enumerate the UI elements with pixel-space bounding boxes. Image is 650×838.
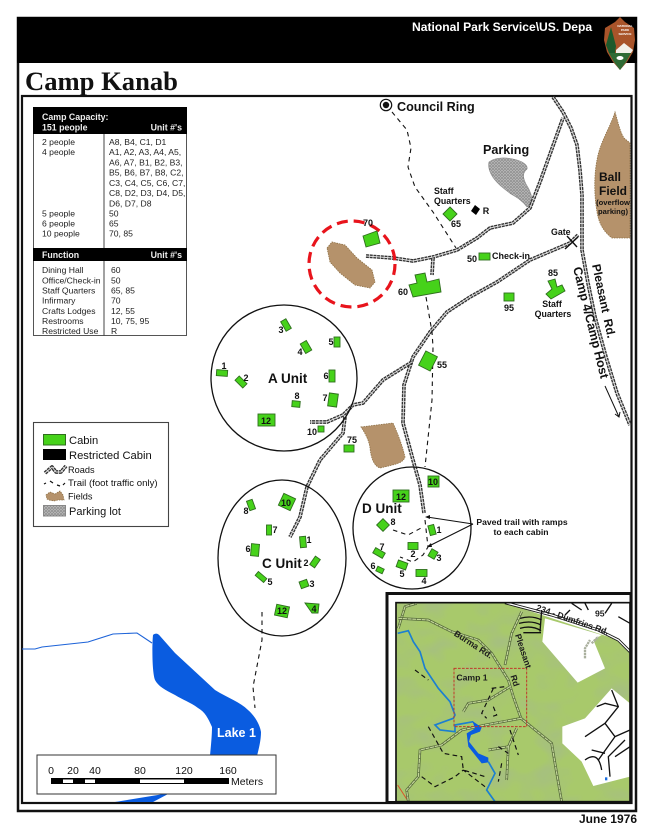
capacity rows: D6, D7, D8 <box>109 198 152 208</box>
locator rectangle: Camp 1 <box>454 668 527 727</box>
function rows: Restricted Use <box>42 326 99 336</box>
legend: roads: Roads <box>68 465 95 475</box>
D Unit circle: 8 <box>390 517 396 527</box>
roads <box>290 97 630 537</box>
C Unit ellipse: 5 <box>267 577 273 587</box>
Lake 1 with stream <box>22 633 261 802</box>
icon: National Park Service arrowhead <box>604 17 635 70</box>
C Unit ellipse <box>218 480 346 636</box>
agency text: National Park Service\US. Depa <box>412 20 592 34</box>
inset map border <box>396 603 630 802</box>
capacity rows: A8, B4, C1, D1 <box>109 137 167 147</box>
function rows: 60 <box>111 265 121 275</box>
capacity rows: 5 people <box>42 208 75 218</box>
capacity rows: C8, D2, D3, D4, D5, <box>109 188 185 198</box>
inset labels: Pleasant <box>513 633 534 670</box>
D Unit circle: 2 <box>410 549 416 559</box>
A Unit circle <box>211 305 357 451</box>
C Unit ellipse: 10 <box>281 498 291 508</box>
inset labels: Camp 1 <box>456 673 488 683</box>
D Unit circle: 7 <box>379 542 385 552</box>
cabins: central area: Staff <box>542 299 562 309</box>
inset labels <box>452 602 610 688</box>
inset locator map <box>396 602 630 802</box>
road labels: Camp 4/Camp Host <box>570 265 612 381</box>
cabins: central area <box>398 186 578 319</box>
capacity rows: 50 <box>109 208 119 218</box>
icon: council ring <box>380 99 392 111</box>
A Unit circle: 6 <box>323 371 329 381</box>
A Unit circle: 1 <box>221 361 227 371</box>
A Unit circle: 3 <box>278 325 284 335</box>
D Unit circle: 6 <box>370 561 376 571</box>
cabins: central area: Check-in <box>492 251 530 261</box>
D Unit circle: 12 <box>396 492 406 502</box>
legend: restricted cabin: Restricted Cabin <box>69 450 152 462</box>
function rows: Infirmary <box>42 296 76 306</box>
ball field label <box>596 170 630 216</box>
ball field label: Ball <box>599 170 621 184</box>
title: Camp Kanab <box>25 66 178 96</box>
D Unit circle: 10 <box>428 477 438 487</box>
C Unit ellipse: 7 <box>272 525 278 535</box>
C Unit ellipse: 6 <box>245 544 251 554</box>
legend: cabin: Cabin <box>69 435 98 447</box>
inset locator panel <box>387 594 631 802</box>
parking label: Parking <box>483 143 529 157</box>
scale bar: 0 <box>48 765 54 777</box>
A Unit circle: 12 <box>261 416 271 426</box>
cabins: central area: Quarters <box>535 309 571 319</box>
cabins 55 and 75 with field: 55 <box>437 360 447 370</box>
inset labels: Rd <box>508 674 522 688</box>
inset labels: 234 - Dumfries Rd. <box>535 602 610 637</box>
function rows: Office/Check-in <box>42 276 101 286</box>
cabins 55 and 75 with field: 75 <box>347 435 357 445</box>
C Unit ellipse: C Unit <box>262 556 302 571</box>
parking lot <box>489 158 532 207</box>
scale bar: 40 <box>89 765 101 777</box>
cabins: central area: Staff <box>434 186 454 196</box>
scale bar: 160 <box>219 765 237 777</box>
ball field label: parking) <box>598 207 628 216</box>
C Unit ellipse: 12 <box>277 606 287 616</box>
cabins: central area: Gate <box>551 227 571 237</box>
road labels <box>570 263 620 417</box>
inset labels: 95 <box>595 609 605 619</box>
road labels: Pleasant Rd. <box>589 263 618 339</box>
cabins: central area: 85 <box>548 268 558 278</box>
capacity rows: 6 people <box>42 218 75 228</box>
cabins: central area: 65 <box>451 219 461 229</box>
cabins: central area: 95 <box>504 303 514 313</box>
field: overflow ball field <box>595 112 630 238</box>
cabins: central area: 60 <box>398 287 408 297</box>
function rows <box>42 265 149 336</box>
legend: fields: Fields <box>68 492 93 502</box>
table heading: function <box>42 250 182 260</box>
icon: National Park Service arrowhead: SERVICE <box>618 32 632 36</box>
table heading: function: Unit #'s <box>151 250 182 260</box>
D Unit circle: D Unit <box>362 501 402 516</box>
map border <box>22 96 632 803</box>
foot trails <box>253 112 456 708</box>
scale bar: Meters <box>231 776 263 788</box>
A Unit circle: 10 <box>307 427 317 437</box>
C Unit ellipse: 4 <box>311 604 317 614</box>
D Unit circle: 1 <box>436 525 442 535</box>
capacity rows: 65 <box>109 218 119 228</box>
scale bar: 20 <box>67 765 79 777</box>
function rows: 12, 55 <box>111 306 135 316</box>
function rows: 65, 85 <box>111 286 135 296</box>
capacity rows: A1, A2, A3, A4, A5, <box>109 147 181 157</box>
scale bar: 120 <box>175 765 193 777</box>
D Unit circle <box>353 467 471 589</box>
capacity rows: 70, 85 <box>109 228 133 238</box>
cabins: central area: R <box>483 206 490 216</box>
A Unit circle: 8 <box>294 391 300 401</box>
A Unit circle: 5 <box>328 337 334 347</box>
table heading: capacity: 151 people <box>42 122 88 132</box>
legend: parking lot: Parking lot <box>69 506 121 518</box>
capacity rows: 10 people <box>42 228 80 238</box>
table heading: capacity: Unit #'s <box>151 122 182 132</box>
capacity rows: C3, C4, C5, C6, C7, <box>109 178 185 188</box>
D Unit circle: 3 <box>436 553 442 563</box>
inset labels: Burma Rd. <box>452 628 494 661</box>
table heading: capacity: Camp Capacity: <box>42 112 109 122</box>
header band <box>17 17 637 63</box>
callout: paved trail arrows: to each cabin <box>494 527 548 537</box>
icon: National Park Service arrowhead: NATIONAL <box>617 24 633 28</box>
function rows: Restrooms <box>42 316 84 326</box>
function rows: Dining Hall <box>42 265 84 275</box>
capacity rows: B5, B6, B7, B8, C2, <box>109 168 184 178</box>
callout: paved trail arrows <box>425 515 568 547</box>
function rows: Staff Quarters <box>42 286 95 296</box>
callout: Cabin 70 field in red circle <box>309 218 395 307</box>
table heading: capacity <box>42 112 182 132</box>
cabins: central area: 50 <box>467 254 477 264</box>
ball field label: (overflow <box>596 198 630 207</box>
C Unit ellipse: 1 <box>306 535 312 545</box>
D Unit circle: 4 <box>421 576 427 586</box>
callout: paved trail arrows: Paved trail with ramps <box>476 517 568 527</box>
legend: trail: Trail (foot traffic only) <box>68 478 158 489</box>
callout: Cabin 70 field in red circle: 70 <box>363 218 373 228</box>
Lake 1 with stream: Lake 1 <box>217 726 256 740</box>
C Unit ellipse: 3 <box>309 579 315 589</box>
C Unit ellipse: 2 <box>303 558 309 568</box>
function rows: 70 <box>111 296 121 306</box>
A Unit circle: 7 <box>322 393 328 403</box>
scale bar: 80 <box>134 765 146 777</box>
scale bar <box>37 755 276 794</box>
capacity rows: A6, A7, B1, B2, B3, <box>109 158 183 168</box>
function rows: R <box>111 326 117 336</box>
council ring label: Council Ring <box>397 100 475 114</box>
A Unit circle: 4 <box>297 347 303 357</box>
icon: National Park Service arrowhead: PARK <box>621 28 630 32</box>
capacity rows: 4 people <box>42 147 75 157</box>
legend <box>34 422 168 526</box>
A Unit circle: 2 <box>243 373 249 383</box>
C Unit ellipse: 8 <box>243 506 249 516</box>
function rows: 10, 75, 95 <box>111 316 149 326</box>
A Unit circle: A Unit <box>268 371 308 386</box>
D Unit circle: 5 <box>399 569 405 579</box>
function rows: Crafts Lodges <box>42 306 96 316</box>
table heading: function: Function <box>42 250 79 260</box>
date: June 1976 <box>579 812 637 826</box>
function rows: 50 <box>111 276 121 286</box>
cabins 55 and 75 with field <box>344 351 447 468</box>
capacity rows <box>42 137 185 238</box>
ball field label: Field <box>599 184 627 198</box>
cabins: central area: Quarters <box>434 196 471 206</box>
capacity rows: 2 people <box>42 137 75 147</box>
capacity table <box>33 107 187 336</box>
